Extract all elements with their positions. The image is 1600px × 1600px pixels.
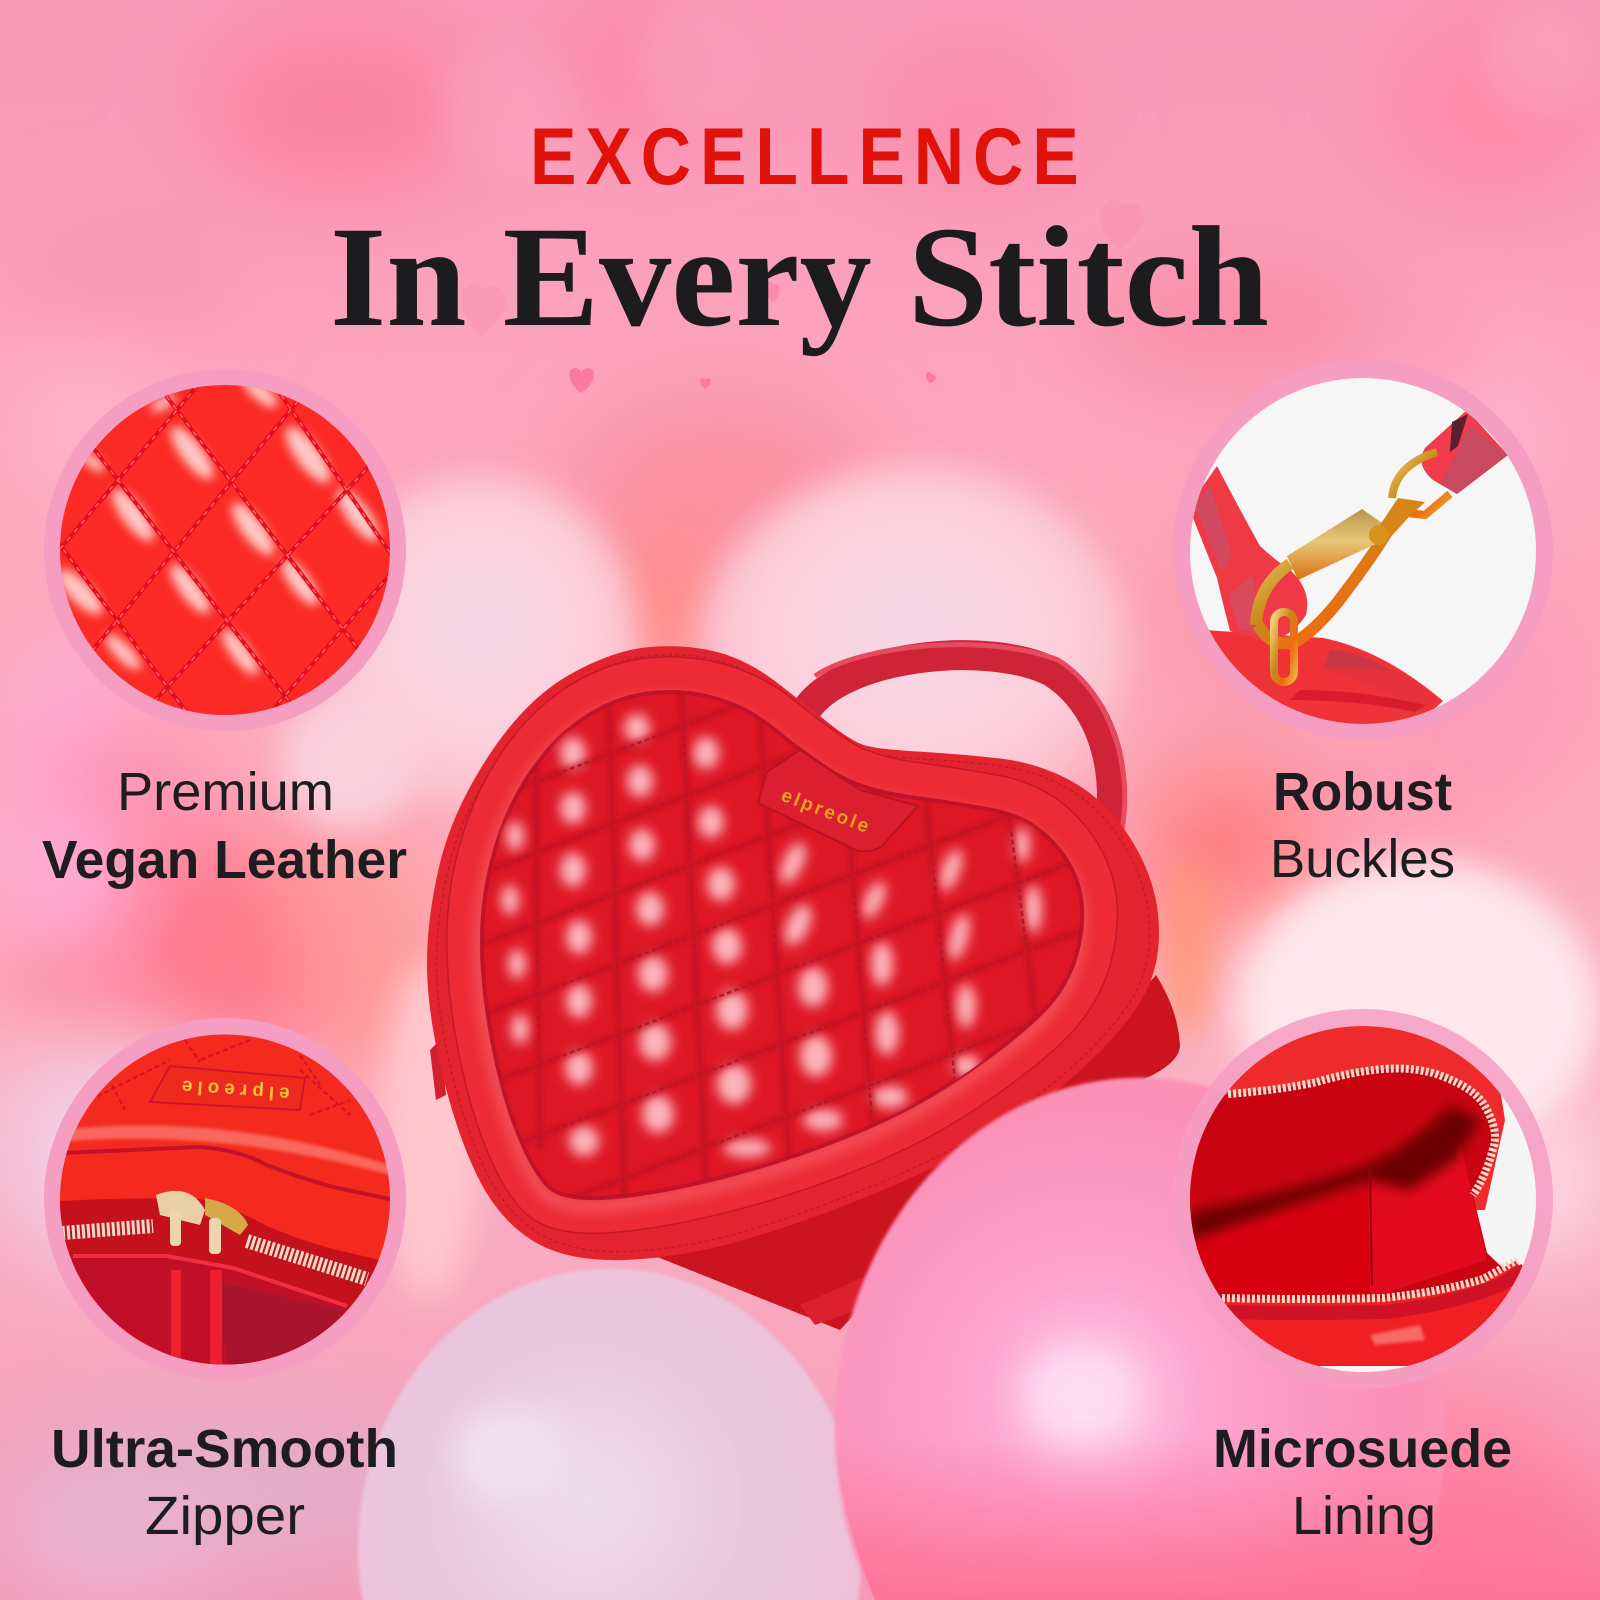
- feature: premium vegan leather: [42, 335, 420, 890]
- quilt stitch lines: [484, 694, 1080, 1196]
- brand tab upside down: [150, 1066, 305, 1110]
- label: Zipper: Zipper: [145, 1486, 305, 1546]
- quilted panel: [482, 692, 1082, 1198]
- circle: lining detail: [1173, 1009, 1553, 1389]
- bag side gusset: [640, 975, 1180, 1330]
- label: Microsuede: Microsuede: [1213, 1419, 1512, 1479]
- feature: ultra-smooth zipper: [40, 1018, 406, 1546]
- label: Premium: Premium: [117, 762, 334, 822]
- bag strap handle: [805, 645, 1125, 845]
- label: Vegan Leather: Vegan Leather: [42, 830, 407, 890]
- brand tab upside down: elpreole: [181, 1075, 290, 1104]
- product: red quilted heart bag: [427, 640, 1180, 1330]
- label: Buckles: Buckles: [1270, 829, 1455, 889]
- feature: robust buckles: [1173, 360, 1553, 889]
- feature: microsuede lining: [1173, 1009, 1553, 1546]
- label: Lining: Lining: [1292, 1486, 1436, 1546]
- balloons behind the bag: [280, 465, 1600, 1300]
- title: EXCELLENCE: EXCELLENCE: [530, 112, 1079, 202]
- foreground balloons: [358, 1078, 1600, 1600]
- circle: quilted leather detail: [44, 335, 420, 780]
- label: Robust: Robust: [1273, 762, 1452, 822]
- circle: gold buckle detail: [1173, 360, 1553, 740]
- circle: zipper detail: [40, 1018, 406, 1380]
- quilt highlights: [501, 714, 1042, 1157]
- brand tab: elpreole: [778, 785, 872, 838]
- title: In Every Stitch: In Every Stitch: [330, 198, 1269, 357]
- brand tab: [758, 750, 918, 851]
- bag heart body: [431, 650, 1155, 1256]
- label: Ultra-Smooth: Ultra-Smooth: [51, 1419, 398, 1479]
- decorative small hearts: [462, 199, 1144, 393]
